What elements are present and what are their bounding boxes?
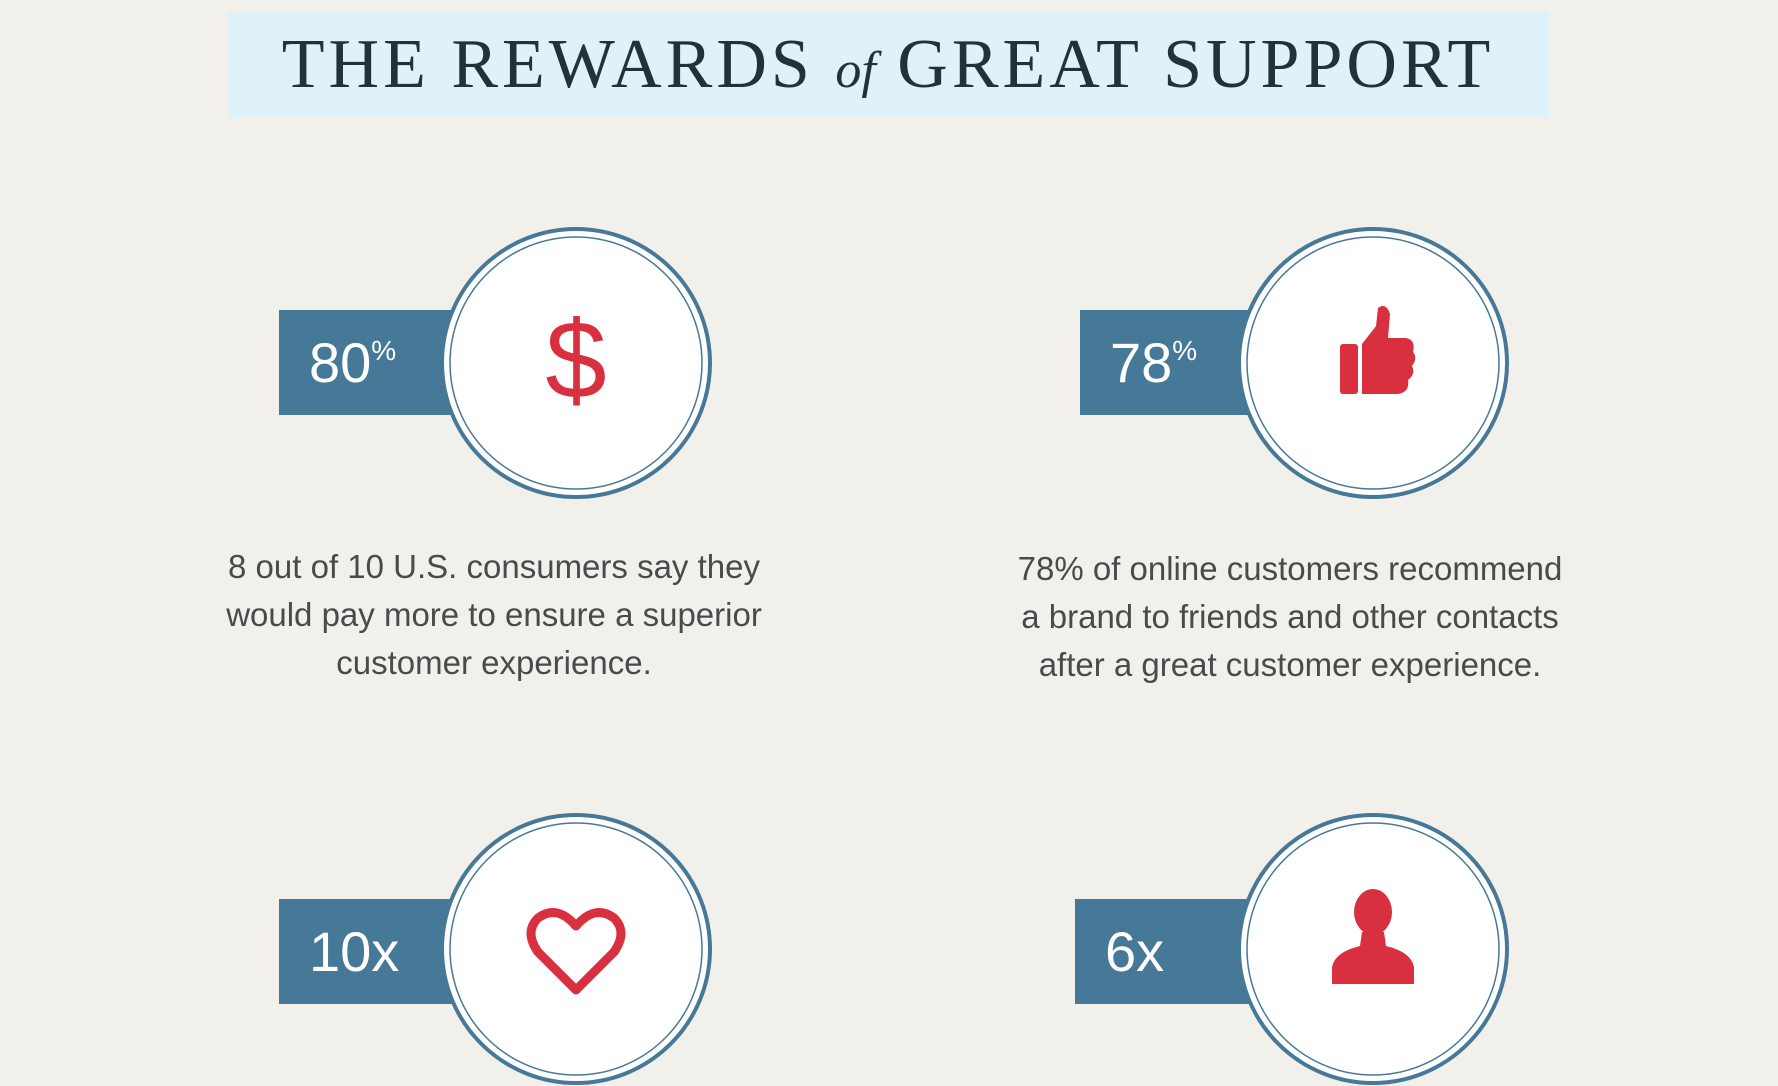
stat box: 6x [1075,899,1260,1004]
text: 80% description: would pay more to ensure a superior [226,596,762,633]
panel: 6x stat [1075,813,1509,1085]
stat box: 10x [279,899,459,1004]
title [227,11,1549,118]
stat box: 6x: 6x [1105,920,1164,983]
stat box: 78% [1080,310,1260,415]
text: 78% description: a brand to friends and other contacts [1021,598,1559,635]
text: 78% description [1018,550,1562,683]
text: 80% description: 8 out of 10 U.S. consumers say they [228,548,760,585]
panel: 10x stat [279,813,712,1085]
text: 78% description: 78% of online customers recommend [1018,550,1562,587]
icon: heart circle [444,813,712,1085]
icon: dollar circle [444,227,712,499]
text: 80% description [226,548,762,681]
panel: 80% stat [279,227,712,499]
title: THE REWARDS of GREAT SUPPORT [282,26,1494,103]
icon: person circle [1241,813,1509,1085]
stat box: 78%: 78% [1110,331,1197,394]
stat box: 80% [279,310,459,415]
stat box: 10x: 10x [309,920,399,983]
panel: 78% stat [1080,227,1509,499]
text: 78% description: after a great customer experience. [1039,646,1541,683]
icon: thumbs up circle [1241,227,1509,499]
icon: dollar circle: $ [545,299,607,422]
text: 80% description: customer experience. [336,644,652,681]
stat box: 80%: 80% [309,331,396,394]
